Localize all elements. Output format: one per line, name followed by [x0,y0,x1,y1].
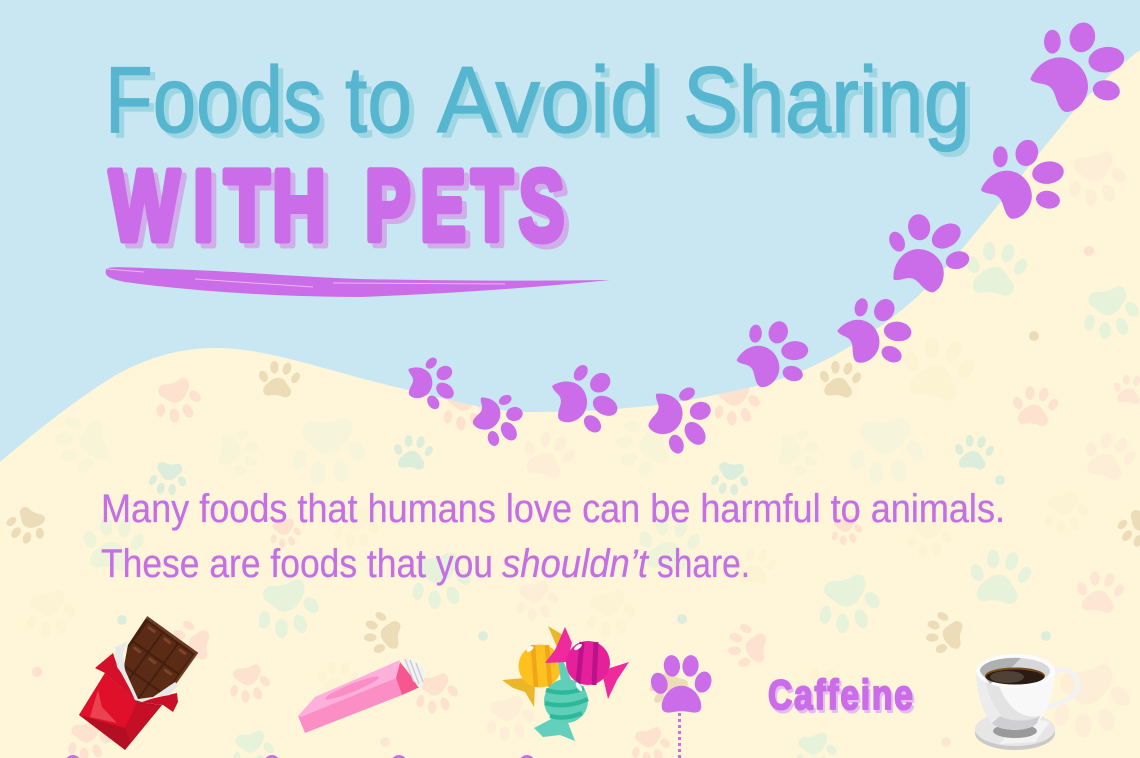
title: Foods to Avoid Sharing: to [350,52,417,157]
title: Foods to Avoid Sharing [105,47,975,157]
title: Foods to Avoid Sharing: Avoid [442,52,665,157]
heading: WITH PETS: PETS [370,156,569,267]
heading: WITH PETS: PETS [365,151,564,262]
icon: chocolate bar [79,616,198,750]
title: Foods to Avoid Sharing: Avoid [437,47,660,152]
title: Foods to Avoid Sharing: Sharing [683,47,970,152]
paw trail [396,20,1126,464]
label: Caffeine: Caffeine [768,673,913,719]
title: Foods to Avoid Sharing: Foods [110,52,327,157]
icon: paw with dotted line [648,654,714,758]
intro text: shouldn’t [502,542,650,586]
intro text: share. [657,542,750,586]
intro text: Many foods that humans love can be harmful to animals. [101,487,1005,531]
icon: pack of gum [298,657,425,733]
intro text: These are foods that you [101,542,493,586]
title: Foods to Avoid Sharing: to [345,47,412,152]
title: Foods to Avoid Sharing: Sharing [688,52,975,157]
label: Caffeine: Caffeine [770,676,915,722]
intro text [101,487,1005,586]
brush underline [106,267,610,297]
heading: WITH PETS: WITH [110,149,326,262]
heading: WITH PETS [110,149,569,267]
section markers [65,755,535,758]
icon: wrapped candies [502,626,629,741]
title: Foods to Avoid Sharing: Foods [105,47,322,152]
icon: coffee cup [975,654,1078,750]
heading: WITH PETS: WITH [115,154,331,267]
